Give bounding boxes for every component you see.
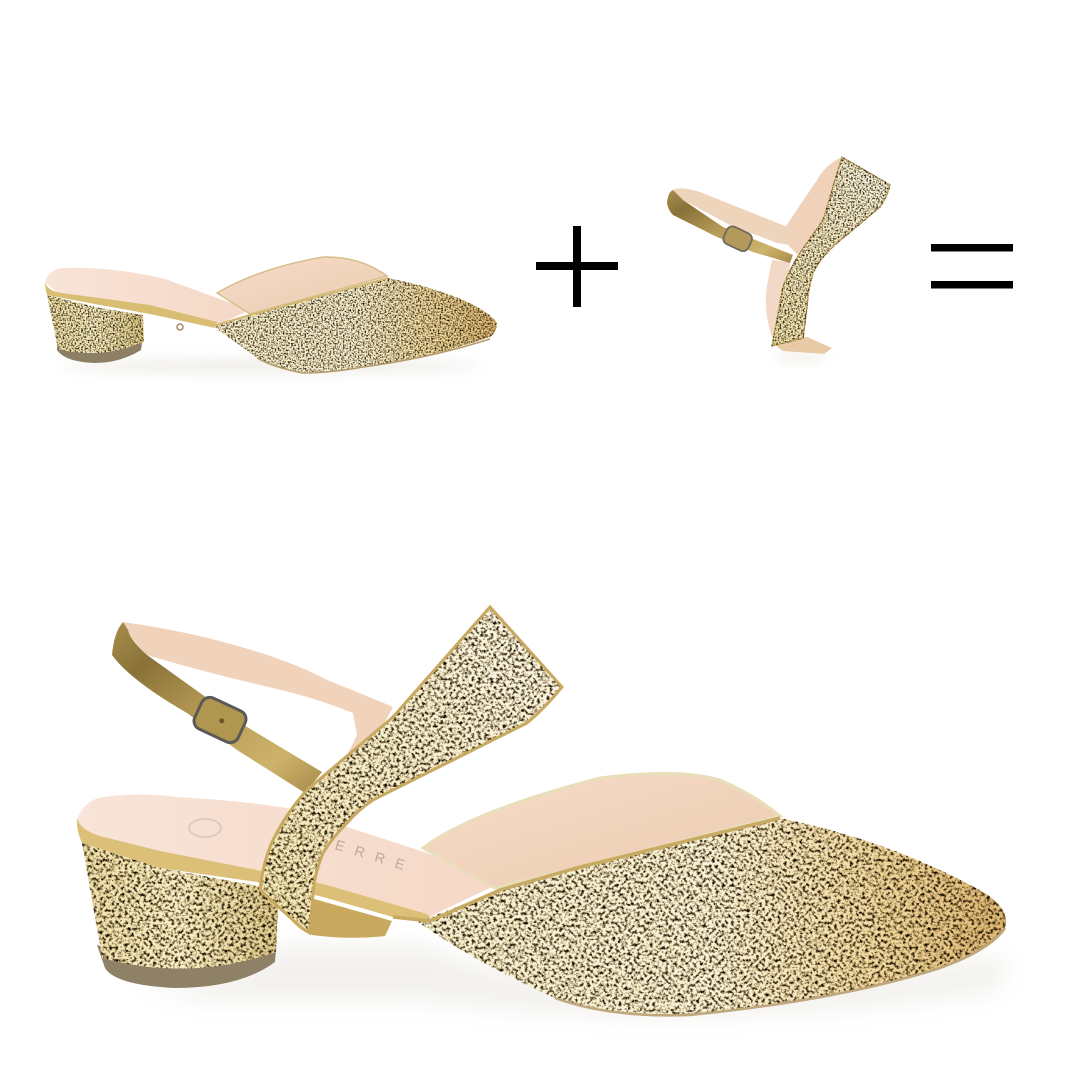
shadow: small mule	[60, 358, 480, 374]
small mule shoe	[45, 257, 497, 374]
lining: small mule	[217, 257, 387, 314]
strap lining upper	[783, 157, 842, 262]
large combined shoe	[77, 607, 1006, 1015]
equals sign	[931, 244, 1013, 288]
glitter vamp: large shoe	[418, 818, 1006, 1015]
gold back band	[667, 190, 793, 263]
gold trim: large shoe	[77, 818, 435, 922]
insole logo mark	[189, 819, 221, 837]
glitter strap: large shoe	[260, 607, 562, 933]
strap underside	[300, 895, 392, 938]
pin: small mule	[177, 324, 183, 330]
strap foot	[771, 337, 832, 354]
insole: small mule	[45, 268, 250, 325]
heel sole: small mule	[57, 336, 143, 363]
glitter strap	[772, 157, 890, 346]
heel sole: large shoe	[97, 935, 277, 988]
heel glitter: large shoe	[82, 843, 279, 969]
vamp trim: large shoe	[393, 818, 780, 921]
inner back band	[673, 188, 790, 245]
vamp trim: small mule	[213, 278, 388, 326]
gold back strap	[112, 622, 322, 793]
gold trim: small mule	[45, 281, 217, 328]
strap trim: large shoe	[260, 607, 562, 933]
buckle	[721, 224, 754, 253]
buckle: large shoe	[191, 694, 249, 746]
heel glitter: small mule	[47, 295, 144, 353]
sole edge: small mule	[257, 339, 490, 373]
shadow: large shoe	[110, 945, 1005, 1015]
back strap lining	[123, 622, 393, 795]
strap lining lower	[766, 260, 790, 340]
ankle strap accessory	[667, 157, 890, 361]
lining: large shoe	[423, 773, 780, 888]
plus sign	[536, 226, 618, 307]
insole logo text: ALTERRE	[278, 820, 417, 876]
glitter vamp: small mule	[213, 278, 497, 373]
sole edge: large shoe	[555, 928, 1005, 1015]
shadow: strap	[772, 353, 828, 361]
insole: large shoe	[77, 794, 500, 918]
